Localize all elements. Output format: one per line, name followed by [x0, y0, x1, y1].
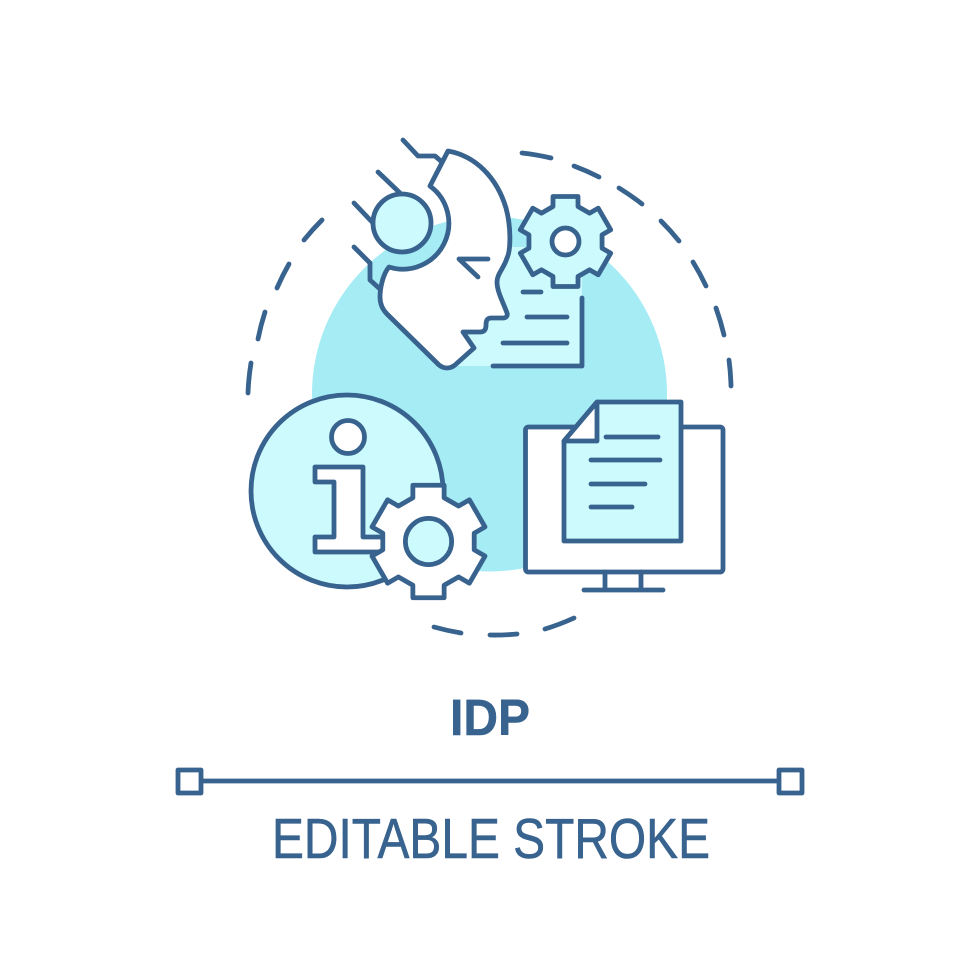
icon: robot head	[354, 140, 510, 368]
heading: IDP: IDP	[450, 689, 530, 746]
background blue circle	[312, 216, 667, 572]
icon: large gear	[372, 485, 485, 598]
icon: document behind head	[450, 247, 582, 366]
icon: small gear	[520, 196, 611, 286]
dashed ring	[248, 153, 731, 635]
icon: information circle	[251, 395, 443, 587]
icon: computer monitor with document	[526, 402, 723, 590]
caption: editable stroke: EDITABLE STROKE	[272, 807, 710, 871]
editable stroke line	[178, 770, 802, 793]
